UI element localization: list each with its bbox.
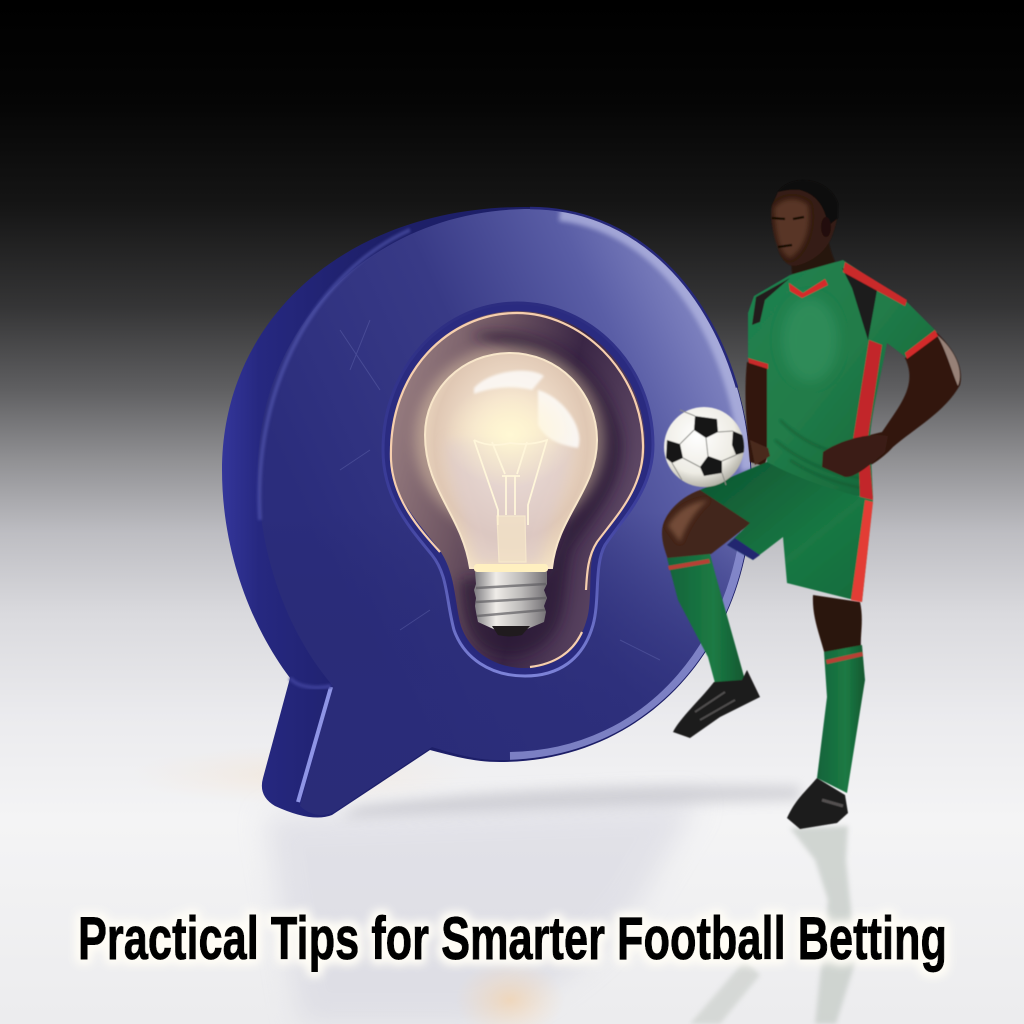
jersey folds <box>775 420 862 488</box>
jersey shoulder panel <box>842 268 878 340</box>
base tip <box>492 626 530 636</box>
standing boot <box>787 778 848 829</box>
head <box>771 181 837 266</box>
football player <box>662 180 961 829</box>
speech bubble <box>222 207 752 818</box>
light bulb <box>415 345 605 636</box>
raised thigh and knee <box>662 485 755 560</box>
screw base <box>474 572 547 632</box>
jersey <box>748 260 937 498</box>
bulb lower tint <box>447 440 572 564</box>
knee highlight <box>668 500 708 542</box>
bulb glow <box>415 345 605 535</box>
right hand <box>822 435 888 477</box>
ear <box>821 217 831 237</box>
filament <box>474 440 547 525</box>
arm rim light <box>937 335 960 386</box>
hair <box>778 180 838 226</box>
light bulb cavity <box>383 303 653 676</box>
floor reflection <box>130 745 856 1024</box>
standing sock <box>817 645 865 793</box>
shorts <box>700 462 873 602</box>
bubble extrusion side <box>222 207 752 818</box>
shorts underside <box>727 538 760 560</box>
raised sock <box>667 554 745 683</box>
bulb glass <box>425 353 597 568</box>
cavity shadow <box>460 332 622 655</box>
filament stem <box>497 516 526 562</box>
soccer ball <box>664 407 745 487</box>
raised boot <box>673 670 760 738</box>
standing leg <box>813 595 862 655</box>
jersey red trims <box>843 262 907 306</box>
filament glow <box>444 383 576 487</box>
bubble front face <box>258 209 751 815</box>
neck <box>790 238 838 292</box>
jersey chest sheen <box>782 298 838 382</box>
reaching arm behind <box>745 362 770 466</box>
shorts stripe <box>851 500 873 602</box>
right arm on hip <box>823 332 961 477</box>
face highlight <box>774 199 809 258</box>
bubble face lower shade <box>258 209 751 815</box>
left hand <box>750 440 770 465</box>
bubble rim highlights <box>510 212 750 758</box>
glowing neck <box>474 564 548 572</box>
eyes and mouth <box>772 217 804 247</box>
cavity glowing edge <box>391 313 643 667</box>
cavity rim <box>383 303 653 676</box>
bulb reflections <box>474 371 544 394</box>
cavity interior <box>390 311 645 668</box>
